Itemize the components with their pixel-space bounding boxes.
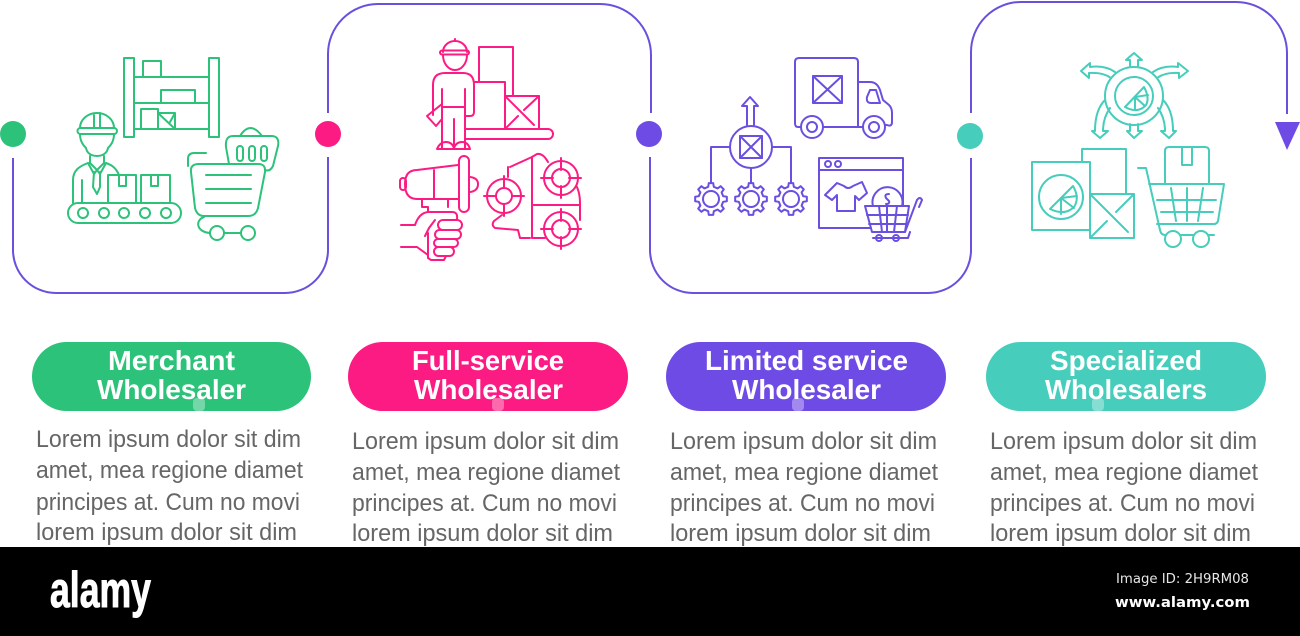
logo wordmark: alamy xyxy=(50,562,151,618)
body text: merchant: lorem ipsum dolor sit dim xyxy=(36,519,297,546)
panel: limited service wholesaler xyxy=(636,58,946,547)
icon: warehouse worker, shelves and carts xyxy=(68,58,278,240)
panel: merchant wholesaler xyxy=(0,58,311,546)
heading pill: merchant: Merchant xyxy=(108,345,235,376)
body text: full-service: principes at. Cum no movi xyxy=(352,490,617,517)
body text: full-service: amet, mea regione diamet xyxy=(352,459,620,486)
body text: full-service: lorem ipsum dolor sit dim xyxy=(352,520,613,547)
icon: citrus distribution, packaging and cart xyxy=(1032,53,1224,247)
body text: merchant: Lorem ipsum dolor sit dim xyxy=(36,426,301,453)
body text: limited service: lorem ipsum dolor sit dim xyxy=(670,520,931,547)
heading pill: limited service: Wholesaler xyxy=(732,374,881,405)
step dot: green xyxy=(0,121,26,147)
step dot: teal xyxy=(957,123,983,149)
body text: specialized: Lorem ipsum dolor sit dim xyxy=(990,428,1257,455)
step dot: pink xyxy=(315,121,341,147)
panel: specialized wholesalers xyxy=(957,53,1266,547)
footer band with watermark credits xyxy=(0,547,1300,636)
heading pill: limited service xyxy=(666,342,946,411)
end arrowhead xyxy=(1275,122,1300,150)
body text: specialized: amet, mea regione diamet xyxy=(990,459,1258,486)
heading pill: specialized xyxy=(986,342,1266,411)
icon: truck, distribution hub, gears and online shop xyxy=(695,58,922,241)
body text: merchant: amet, mea regione diamet xyxy=(36,457,303,484)
body text: limited service: amet, mea regione diamet xyxy=(670,459,938,486)
heading pill: limited service: Limited service xyxy=(705,345,908,376)
heading pill: specialized: Specialized xyxy=(1050,345,1202,376)
image id: Image ID: 2H9RM08 xyxy=(1116,571,1249,587)
heading pill: full-service: Full-service xyxy=(412,345,564,376)
website: www.alamy.com xyxy=(1115,595,1250,611)
body text: specialized xyxy=(990,428,1258,547)
step dot: purple xyxy=(636,121,662,147)
body text: limited service: principes at. Cum no movi xyxy=(670,490,935,517)
heading pill: merchant xyxy=(32,342,311,411)
body text: limited service: Lorem ipsum dolor sit dim xyxy=(670,428,937,455)
heading pill: merchant: Wholesaler xyxy=(97,374,246,405)
panel: full-service wholesaler xyxy=(315,39,628,547)
body text: limited service xyxy=(670,428,938,547)
body text: merchant: principes at. Cum no movi xyxy=(36,489,300,516)
flow line connecting the four steps xyxy=(13,2,1287,293)
body text: full-service xyxy=(352,428,620,547)
heading pill: full-service: Wholesaler xyxy=(414,374,563,405)
body text: merchant xyxy=(36,426,303,546)
icon: worker, boxes, megaphone and target map xyxy=(400,39,581,260)
heading pill: full-service xyxy=(348,342,628,411)
body text: specialized: lorem ipsum dolor sit dim xyxy=(990,520,1251,547)
heading pill: specialized: Wholesalers xyxy=(1045,374,1207,405)
body text: full-service: Lorem ipsum dolor sit dim xyxy=(352,428,619,455)
body text: specialized: principes at. Cum no movi xyxy=(990,490,1255,517)
